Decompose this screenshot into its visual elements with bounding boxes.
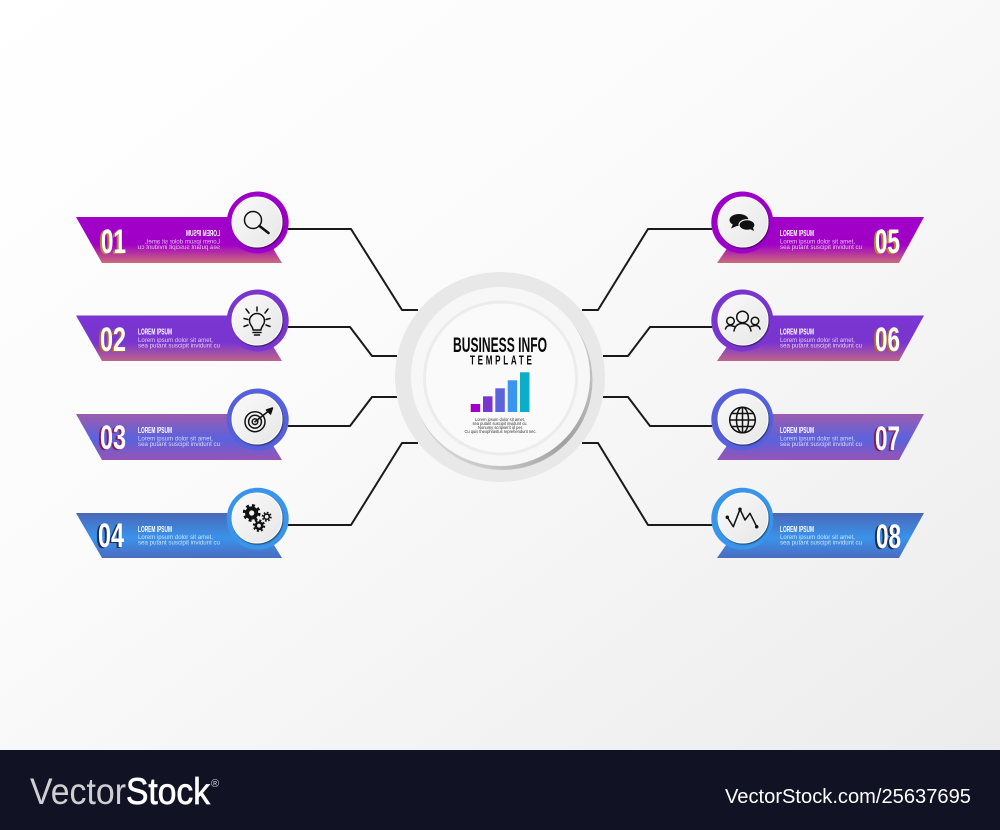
- hub body text: Lorem ipsum dolor sit amet,: [475, 417, 525, 422]
- number 01: 01: [99, 224, 124, 262]
- number 06: 06: [875, 321, 900, 359]
- icon: gears: [244, 505, 271, 531]
- text block 07: Lorem ipsum dolor sit amet,: [780, 436, 855, 442]
- icon: target: [245, 408, 272, 432]
- badge 06: [711, 290, 773, 352]
- footer logo: ®: [211, 778, 219, 790]
- hub disc: [411, 287, 590, 466]
- footer logo: [30, 771, 219, 812]
- text block 04: sea putant suscipit invidunt cu: [138, 540, 220, 546]
- number 01: 01: [101, 223, 126, 261]
- mirrored text block 01: sea putant suscipit invidunt cu: [138, 244, 220, 251]
- banner 08: [717, 513, 924, 558]
- hub inner ring: [424, 302, 576, 454]
- banner 07: [717, 414, 924, 460]
- mirrored text block 01: LOREM IPSUM: [186, 228, 220, 238]
- banner 06: [717, 316, 924, 361]
- text block 02: sea putant suscipit invidunt cu: [138, 342, 220, 350]
- mirrored text block 01: [138, 228, 220, 251]
- badge 05: [711, 192, 773, 254]
- text block 02: LOREM IPSUM: [138, 326, 172, 336]
- bar chart: [471, 372, 530, 412]
- banner 03: [76, 414, 282, 460]
- text block 07: LOREM IPSUM: [780, 425, 814, 435]
- number 04: 04: [98, 517, 124, 555]
- hub body text: [464, 417, 536, 434]
- text block 06: LOREM IPSUM: [780, 326, 814, 336]
- badge 07: [711, 388, 773, 450]
- panel: central hub: [395, 272, 605, 482]
- number 03: 03: [100, 419, 126, 457]
- number 02: 02: [98, 322, 124, 360]
- banner 01: [76, 217, 282, 263]
- icon: people group: [726, 311, 760, 331]
- text block 03: [138, 425, 220, 448]
- number 03: 03: [98, 420, 124, 458]
- footer image id: VectorStock.com/25637695: [725, 786, 971, 808]
- icon: globe: [730, 407, 755, 433]
- text block 08: LOREM IPSUM: [780, 524, 814, 534]
- badge 04: [227, 488, 289, 550]
- text block 05: [780, 228, 862, 251]
- hub body text: sea putant suscipit invidunt cu.: [472, 421, 528, 426]
- footer logo: Stock: [126, 771, 210, 812]
- disc 08: [718, 493, 768, 543]
- panel: item 08: [711, 488, 924, 558]
- banner 04: [76, 513, 282, 558]
- panel: item 04: [76, 488, 289, 558]
- number 05: 05: [873, 224, 898, 262]
- heading: template: TEMPLATE: [470, 354, 535, 368]
- disc 04: [232, 493, 282, 543]
- icon: magnifier: [244, 212, 268, 233]
- icon: light bulb: [244, 307, 270, 335]
- banner 02: [76, 316, 282, 361]
- panel: item 05: [711, 192, 924, 263]
- disc 01: [232, 197, 282, 247]
- badge 03: [227, 388, 289, 450]
- text block 02: Lorem ipsum dolor sit amet,: [138, 337, 213, 344]
- text block 06: sea putant suscipit invidunt cu: [780, 342, 862, 350]
- number 06: 06: [873, 322, 898, 360]
- panel: item 02: [76, 290, 289, 361]
- number 04: 04: [96, 518, 122, 556]
- hub outer ring: [395, 272, 605, 482]
- hub disc shadow: [412, 290, 592, 470]
- text block 08: [780, 524, 862, 546]
- text block 07: [780, 425, 862, 448]
- footer logo: Vector: [30, 771, 126, 812]
- number 02: 02: [100, 321, 126, 359]
- text block 05: sea putant suscipit invidunt cu: [780, 244, 862, 251]
- text block 05: LOREM IPSUM: [780, 228, 814, 238]
- connector lines: [288, 229, 712, 525]
- icon: speech bubbles: [730, 214, 755, 231]
- hub body text: Nonumy scripserit id per.: [478, 425, 523, 430]
- disc 05: [718, 197, 768, 247]
- text block 06: [780, 326, 862, 350]
- icon: line chart: [726, 508, 758, 528]
- badge 01: [227, 192, 289, 254]
- text block 04: Lorem ipsum dolor sit amet,: [138, 534, 213, 541]
- text block 03: LOREM IPSUM: [138, 425, 172, 435]
- panel: item 06: [711, 290, 924, 361]
- disc 03: [232, 394, 282, 444]
- hub body text: Cu quis theophrastus reprehendunt nec.: [464, 429, 536, 434]
- banner 05: [717, 217, 924, 263]
- text block 03: sea putant suscipit invidunt cu: [138, 441, 220, 448]
- text block 06: Lorem ipsum dolor sit amet,: [780, 337, 855, 344]
- number 05: 05: [875, 223, 900, 261]
- text block 03: Lorem ipsum dolor sit amet,: [138, 436, 213, 442]
- text block 05: Lorem ipsum dolor sit amet,: [780, 238, 855, 246]
- footer bar: [0, 750, 1000, 830]
- text block 04: LOREM IPSUM: [138, 524, 172, 534]
- heading: business info: BUSINESS INFO: [453, 334, 547, 357]
- panel: item 07: [711, 388, 924, 460]
- number 07: 07: [875, 420, 900, 458]
- number 08: 08: [874, 519, 899, 557]
- text block 02: [138, 326, 220, 350]
- text block 08: sea putant suscipit invidunt cu: [780, 540, 862, 546]
- badge 02: [227, 290, 289, 352]
- text block 04: [138, 524, 220, 546]
- disc 06: [718, 295, 768, 345]
- disc 07: [718, 394, 768, 444]
- mirrored text block 01: Lorem ipsum dolor sit amet,: [145, 238, 220, 246]
- disc 02: [232, 295, 282, 345]
- panel: item 03: [76, 388, 289, 460]
- number 07: 07: [873, 421, 898, 459]
- text block 07: sea putant suscipit invidunt cu: [780, 441, 862, 448]
- number 08: 08: [876, 518, 901, 556]
- text block 08: Lorem ipsum dolor sit amet,: [780, 534, 855, 541]
- badge 08: [711, 488, 773, 550]
- panel: item 01: [76, 192, 289, 263]
